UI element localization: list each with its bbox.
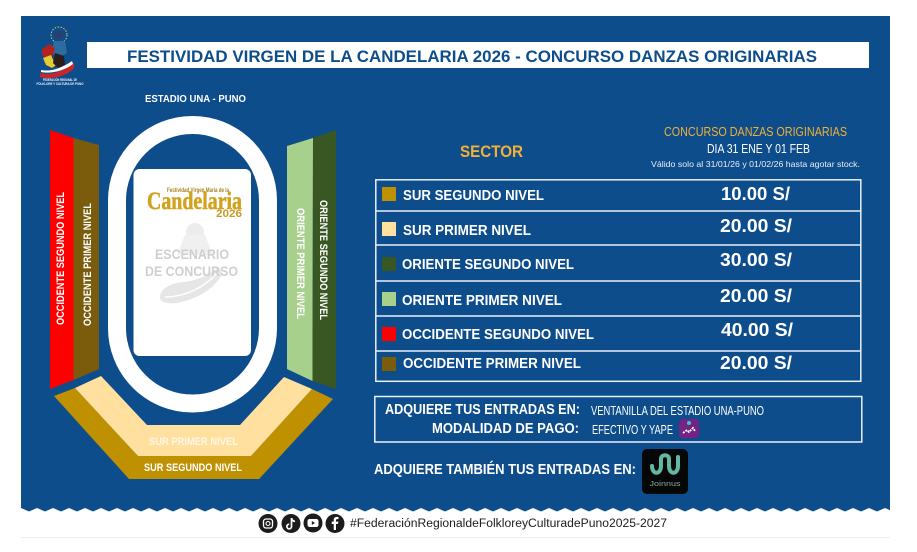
icon: youtube bbox=[304, 514, 322, 532]
purchase info box bbox=[375, 396, 862, 442]
price table bbox=[376, 180, 861, 381]
sector: occidente segundo nivel: OCCIDENTE SEGUNDO NIVEL bbox=[55, 192, 67, 325]
footer line bbox=[21, 536, 890, 538]
sector: sur primer nivel bbox=[75, 376, 312, 456]
icon: joinnus: Joinnus bbox=[650, 479, 681, 488]
row: occidente segundo nivel: 40.00 S/ bbox=[721, 320, 793, 340]
purchase info box: ADQUIERE TUS ENTRADAS EN: bbox=[385, 402, 580, 418]
sector: occidente primer nivel bbox=[74, 138, 99, 380]
sector: occidente segundo nivel bbox=[50, 130, 74, 389]
sector: sur segundo nivel: SUR SEGUNDO NIVEL bbox=[144, 462, 242, 474]
row: sur segundo nivel: 10.00 S/ bbox=[721, 184, 790, 204]
logo: federation emblem bbox=[36, 27, 84, 86]
sector: occidente primer nivel: OCCIDENTE PRIMER NIVEL bbox=[82, 203, 94, 326]
footer hashtag: #FederaciónRegionaldeFolkloreyCulturadePuno2025-2027 bbox=[350, 518, 667, 530]
stage bbox=[134, 169, 251, 356]
stage logo: Candelaria bbox=[147, 188, 242, 220]
sector: oriente primer nivel bbox=[287, 138, 313, 381]
heading: concurso bbox=[651, 124, 860, 169]
row: occidente segundo nivel: OCCIDENTE SEGUNDO NIVEL bbox=[402, 327, 594, 343]
sector: oriente segundo nivel: ORIENTE SEGUNDO NIVEL bbox=[317, 200, 329, 320]
stadium name: ESTADIO UNA - PUNO bbox=[145, 94, 246, 105]
icon: joinnus bbox=[642, 449, 688, 494]
logo: federation emblem: FOLKLORE Y CULTURA DE PUNO bbox=[36, 82, 84, 86]
sector: oriente primer nivel: ORIENTE PRIMER NIVEL bbox=[294, 208, 306, 319]
row: sur primer nivel bbox=[382, 216, 792, 239]
row: oriente primer nivel: 20.00 S/ bbox=[720, 286, 792, 306]
heading: concurso: Válido solo al 31/01/26 y 01/02/26 hasta agotar stock. bbox=[651, 159, 860, 169]
stage watermark: virgin bbox=[160, 223, 222, 303]
purchase info box: MODALIDAD DE PAGO: bbox=[432, 421, 579, 437]
row: occidente segundo nivel bbox=[382, 320, 793, 343]
row: oriente primer nivel: ORIENTE PRIMER NIVEL bbox=[402, 293, 562, 309]
row: occidente primer nivel: 20.00 S/ bbox=[720, 353, 792, 373]
purchase info box: VENTANILLA DEL ESTADIO UNA-PUNO bbox=[591, 403, 764, 418]
sector: oriente segundo nivel bbox=[312, 130, 336, 389]
heading: concurso: CONCURSO DANZAS ORIGINARIAS bbox=[664, 124, 847, 139]
purchase info box: EFECTIVO Y YAPE bbox=[592, 422, 673, 437]
row: oriente segundo nivel: ORIENTE SEGUNDO NIVEL bbox=[402, 257, 574, 273]
row: oriente primer nivel bbox=[382, 286, 792, 309]
heading: concurso: DIA 31 ENE Y 01 FEB bbox=[707, 142, 810, 156]
stage text: ESCENARIO bbox=[155, 246, 229, 262]
social icons bbox=[258, 514, 344, 533]
icon: facebook bbox=[326, 514, 344, 533]
title bar bbox=[87, 42, 869, 68]
row: occidente primer nivel bbox=[382, 353, 792, 373]
stage text bbox=[145, 246, 238, 279]
icon: tiktok bbox=[282, 514, 300, 533]
sector: sur primer nivel: SUR PRIMER NIVEL bbox=[149, 436, 238, 448]
icon: instagram bbox=[258, 514, 278, 533]
row: oriente segundo nivel: 30.00 S/ bbox=[720, 250, 792, 270]
row: occidente primer nivel: OCCIDENTE PRIMER NIVEL bbox=[403, 356, 581, 372]
stage logo: Candelaria: 2026 bbox=[216, 208, 242, 220]
row: sur primer nivel: 20.00 S/ bbox=[720, 216, 792, 236]
row: sur segundo nivel bbox=[382, 184, 790, 204]
row: oriente segundo nivel bbox=[382, 250, 792, 273]
joinnus purchase line: ADQUIERE TAMBIÉN TUS ENTRADAS EN: bbox=[374, 461, 636, 478]
icon: yape bbox=[679, 419, 699, 438]
row: sur primer nivel: SUR PRIMER NIVEL bbox=[403, 223, 531, 239]
logo: federation emblem: FEDERACIÓN REGIONAL DE bbox=[43, 77, 77, 82]
stage logo: Candelaria: Festividad Virgen María de la bbox=[167, 188, 229, 194]
title bar: FESTIVIDAD VIRGEN DE LA CANDELARIA 2026 - CONCURSO DANZAS ORIGINARIAS bbox=[127, 47, 817, 66]
sector: sur segundo nivel bbox=[54, 388, 333, 479]
row: sur segundo nivel: SUR SEGUNDO NIVEL bbox=[403, 188, 544, 204]
stage text: DE CONCURSO bbox=[145, 263, 238, 279]
track bbox=[117, 125, 268, 404]
heading: sector: SECTOR bbox=[460, 142, 523, 161]
stage logo: Candelaria: Candelaria bbox=[147, 188, 242, 215]
